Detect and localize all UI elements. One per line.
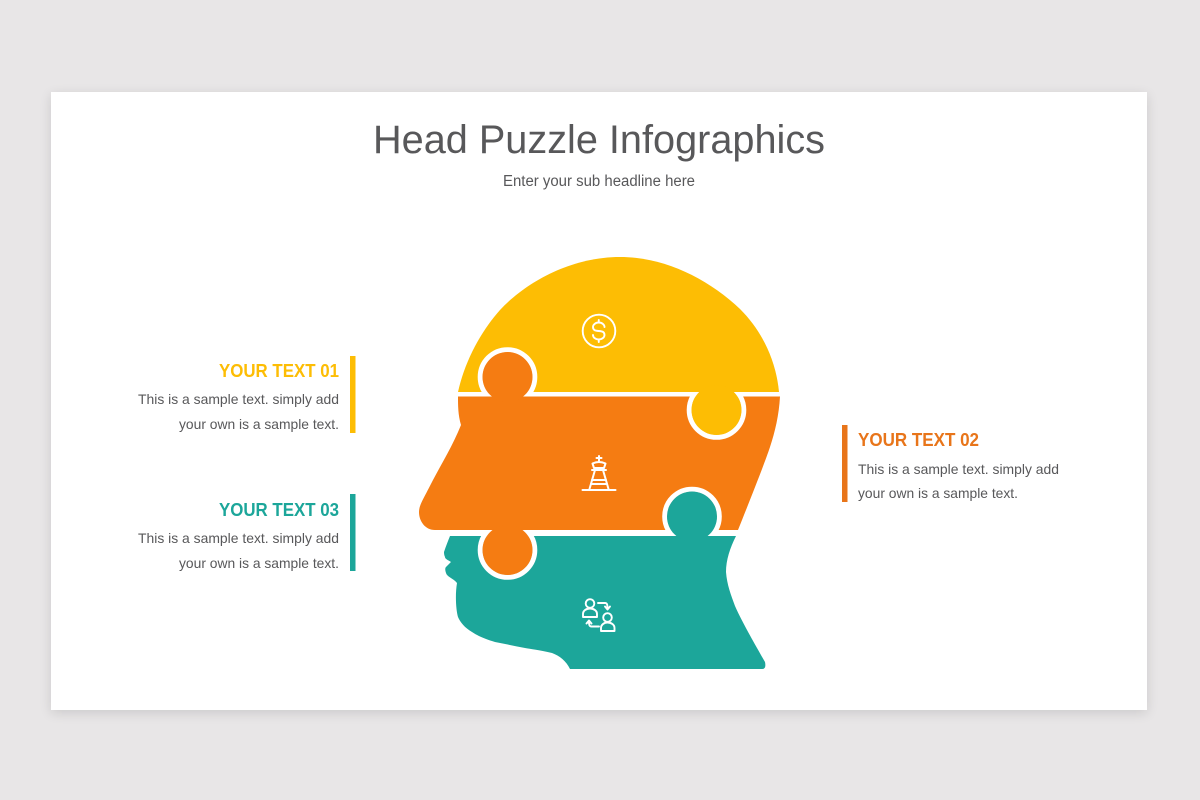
body 01: This is a sample text. simply add xyxy=(138,391,339,407)
callout: your text 01 xyxy=(138,356,356,433)
tab: orange into teal xyxy=(482,525,532,575)
accent bar 03 xyxy=(350,494,356,571)
accent bar 01 xyxy=(350,356,356,433)
heading 01: YOUR TEXT 01 xyxy=(219,361,339,381)
body 01 xyxy=(138,391,339,432)
callout: your text 03 xyxy=(138,494,356,571)
icon: people exchange xyxy=(583,599,614,631)
puzzle piece: orange face xyxy=(419,396,780,530)
puzzle piece: yellow crown xyxy=(458,257,779,392)
body 02: your own is a sample text. xyxy=(858,485,1018,501)
heading 02: YOUR TEXT 02 xyxy=(858,430,979,450)
subtitle: Enter your sub headline here xyxy=(503,173,695,190)
heading 03: YOUR TEXT 03 xyxy=(219,500,339,520)
head puzzle xyxy=(419,257,780,669)
tab: teal into orange xyxy=(667,492,717,542)
title: Head Puzzle Infographics xyxy=(373,118,825,162)
body 03 xyxy=(138,530,339,571)
icon: chess piece xyxy=(582,456,616,490)
slide card xyxy=(51,92,1147,713)
tab: orange into yellow xyxy=(482,352,532,402)
puzzle piece: teal neck xyxy=(444,536,765,669)
body 02: This is a sample text. simply add xyxy=(858,461,1059,477)
callout: your text 02 xyxy=(842,425,1059,502)
body 03: your own is a sample text. xyxy=(179,555,339,571)
accent bar 02 xyxy=(842,425,848,502)
white rings around tabs xyxy=(480,350,744,577)
icon: dollar coin xyxy=(583,315,615,347)
body 02 xyxy=(858,461,1059,501)
body 01: your own is a sample text. xyxy=(179,416,339,432)
tab: yellow into orange xyxy=(692,385,742,435)
body 03: This is a sample text. simply add xyxy=(138,530,339,546)
